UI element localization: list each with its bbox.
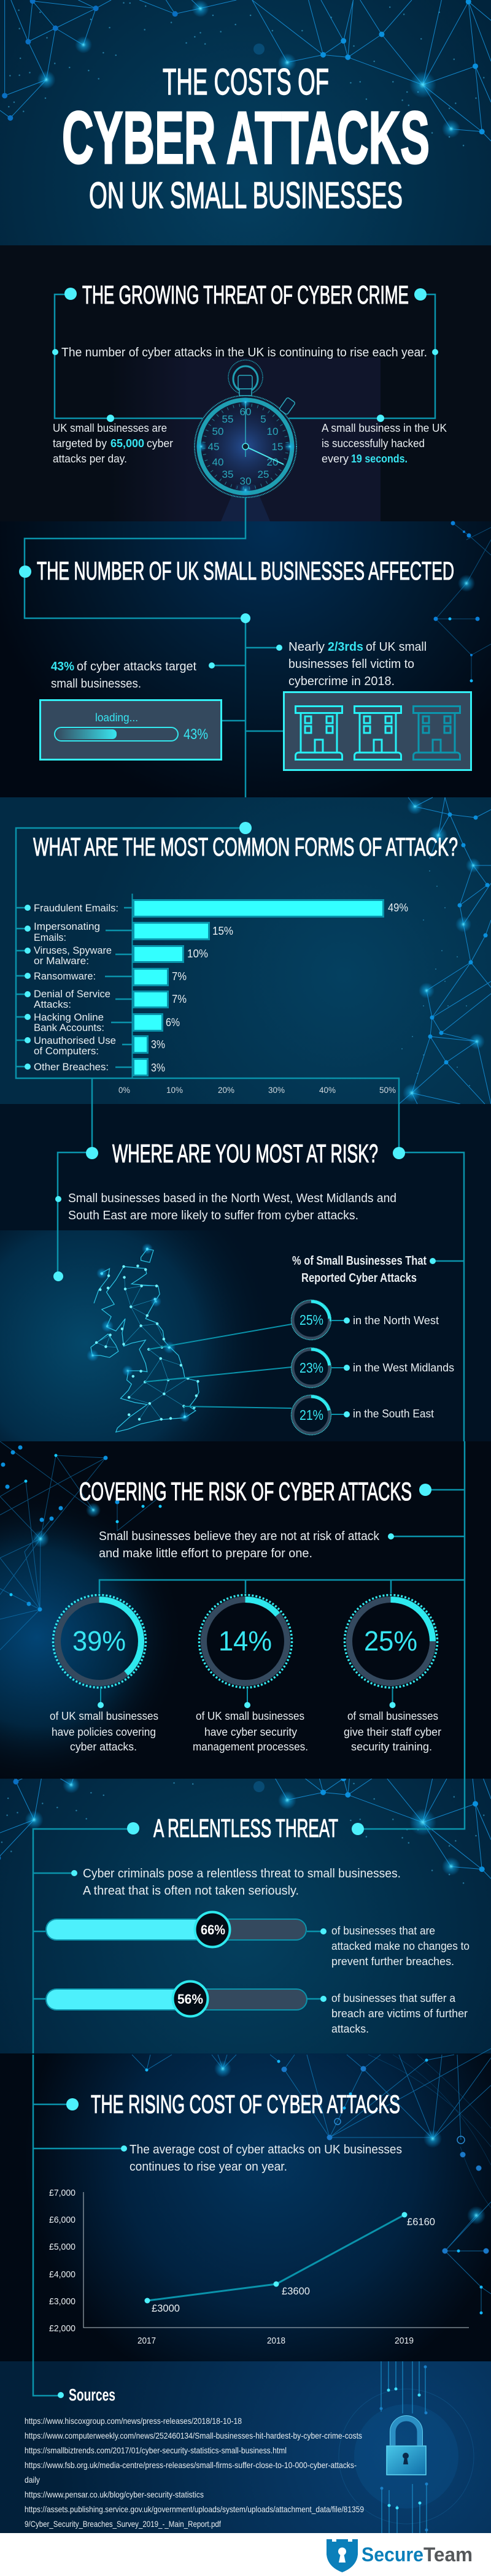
y axis labels: £3,000	[49, 2296, 75, 2307]
y axis labels: £7,000	[49, 2188, 75, 2198]
stat: 65,000 attacks per day	[53, 422, 173, 465]
intro text: Cyber criminals pose a relentless threat to small businesses.	[83, 1867, 401, 1880]
icon: building 3	[414, 707, 460, 759]
text: 43 percent: small businesses.	[51, 677, 141, 691]
line chart	[49, 2188, 469, 2346]
text: two thirds: businesses fell victim to	[288, 657, 414, 671]
intro text: The average cost of cyber attacks on UK businesses	[130, 2143, 402, 2156]
bar: fraudulent emails	[25, 900, 408, 916]
stat: hacked every 19 seconds: 19 seconds.	[351, 453, 408, 465]
bar: fraudulent emails: 49%	[388, 902, 408, 914]
right frame line	[358, 1441, 465, 1829]
gauge: South East 21%: 21%	[300, 1407, 323, 1423]
icon: stopwatch: 35	[222, 469, 233, 480]
bar: hacking online bank accounts	[25, 1011, 180, 1033]
gauge: 14 percent: have cyber security	[204, 1726, 297, 1738]
progress bar: 66 percent	[33, 1912, 470, 1968]
bar: other breaches	[25, 1059, 165, 1076]
source links: daily	[25, 2475, 40, 2485]
frame connector	[33, 1779, 465, 2055]
bar: hacking online bank accounts: Bank Accounts:	[34, 1022, 104, 1033]
x axis labels	[118, 1085, 396, 1095]
icon: stopwatch: 50	[212, 426, 223, 437]
y axis labels	[49, 2188, 75, 2334]
icon: building 1	[296, 707, 342, 759]
stat: hacked every 19 seconds: A small business in the UK	[322, 422, 447, 434]
text: two thirds: Nearly	[288, 640, 325, 654]
progress bar: 56 percent: breach are victims of further	[331, 2007, 468, 2020]
stat: 65,000 attacks per day: 65,000	[110, 437, 144, 450]
heading	[33, 2090, 400, 2118]
bar: fraudulent emails: Fraudulent Emails:	[34, 902, 118, 914]
gauge: 14 percent: management processes.	[193, 1741, 308, 1753]
icon: stopwatch: 10	[267, 426, 278, 437]
bar: viruses: or Malware:	[34, 955, 89, 967]
stat: 65,000 attacks per day: attacks per day.	[53, 453, 127, 465]
gauge: 39 percent: cyber attacks.	[70, 1741, 137, 1753]
bar: denial of service: Attacks:	[34, 999, 71, 1010]
panel: footer	[0, 2533, 491, 2576]
text: two thirds: 2/3rds	[328, 640, 363, 654]
line chart: 2019	[395, 2336, 414, 2346]
source links: https://smallbiztrends.com/2017/01/cyber-security-statistics-small-business.html	[25, 2445, 287, 2455]
stat: hacked every 19 seconds	[322, 422, 447, 465]
panel: growing threat	[0, 245, 491, 521]
gauge: 25 percent	[344, 1595, 441, 1753]
legend heading: Reported Cyber Attacks	[301, 1271, 417, 1285]
bar: unauthorised use: Unauthorised Use	[34, 1035, 116, 1046]
icon: stopwatch: 20	[267, 456, 278, 468]
bar: denial of service	[25, 988, 187, 1010]
frame connector	[52, 288, 438, 422]
line chart: £3600	[282, 2285, 310, 2297]
bar: ransomware	[25, 969, 187, 985]
icon: building 2	[355, 707, 401, 759]
source links: https://www.computerweekly.com/news/252460134/Small-businesses-hit-hardest-by-cyber-crime-costs	[25, 2431, 362, 2440]
loading bar box: loading...	[95, 711, 138, 724]
gauge: 39 percent	[50, 1595, 158, 1753]
title	[62, 61, 430, 216]
gauge: 14 percent: of UK small businesses	[196, 1710, 304, 1722]
legend heading: % of Small Businesses That	[292, 1254, 427, 1268]
frame connector	[16, 822, 399, 1153]
source links: https://assets.publishing.service.gov.uk/government/uploads/system/uploads/attachment_data/file/81359	[25, 2504, 364, 2514]
progress bar: 66 percent: prevent further breaches.	[331, 1955, 454, 1968]
progress bar: 66 percent: 66%	[201, 1922, 225, 1938]
icon: stopwatch: 15	[272, 441, 283, 453]
progress bar: 56 percent: 56%	[177, 1991, 203, 2007]
source links: https://www.pensar.co.uk/blog/cyber-security-statistics	[25, 2490, 204, 2499]
gauge: 39 percent: 39%	[72, 1625, 126, 1657]
icon: stopwatch: 55	[222, 413, 233, 425]
panel: most common forms of attack	[0, 797, 491, 1153]
stat: 65,000 attacks per day: cyber	[147, 437, 173, 450]
icon: stopwatch: 40	[212, 456, 223, 468]
legend heading	[292, 1254, 464, 1285]
text: two thirds: of UK small	[366, 640, 427, 654]
bar: other breaches: Other Breaches:	[34, 1061, 109, 1073]
icon: stopwatch: 25	[258, 469, 269, 480]
bar: hacking online bank accounts: Hacking Online	[34, 1011, 104, 1023]
gauge: 14 percent	[193, 1595, 308, 1753]
gauge: 25 percent: of small businesses	[347, 1710, 438, 1722]
panel: relentless threat	[0, 1779, 491, 2053]
x axis labels: 40%	[319, 1085, 336, 1095]
progress bar: 66 percent: of businesses that are	[331, 1925, 435, 1937]
text: 43 percent: of cyber attacks target	[77, 660, 196, 673]
bar: viruses: 10%	[187, 948, 208, 960]
frame connector	[33, 2055, 61, 2396]
text: 43 percent: 43%	[51, 660, 74, 673]
line chart: 2018	[267, 2336, 285, 2346]
gauge: North West 25%	[291, 1300, 439, 1340]
panel: sources	[0, 2361, 491, 2533]
progress bar: 56 percent: attacks.	[331, 2023, 369, 2035]
stat: 65,000 attacks per day: UK small businesses are	[53, 422, 167, 434]
progress bar: 56 percent	[33, 1981, 468, 2035]
gauge: 39 percent: have policies covering	[52, 1726, 156, 1738]
gauge: 39 percent: of UK small businesses	[50, 1710, 158, 1722]
title: THE COSTS OF	[163, 61, 329, 102]
logo: SecureTeam: Secure	[361, 2543, 423, 2566]
line chart: 2017	[137, 2336, 156, 2346]
bar: other breaches: 3%	[151, 1062, 165, 1074]
heading: A RELENTLESS THREAT	[153, 1814, 338, 1842]
gauge: West Midlands 23%: 23%	[300, 1360, 323, 1376]
y axis labels: £5,000	[49, 2242, 75, 2252]
bar chart	[16, 894, 408, 1095]
heading: sources	[58, 2385, 115, 2404]
bar: denial of service: Denial of Service	[34, 988, 110, 1000]
icon: padlock with circuits	[339, 2361, 474, 2533]
source links: 9/Cyber_Security_Breaches_Survey_2019_-_Main_Report.pdf	[25, 2519, 221, 2529]
gauge: West Midlands 23%: in the West Midlands	[353, 1362, 454, 1374]
intro text: South East are more likely to suffer from cyber attacks.	[68, 1209, 358, 1222]
bar: viruses: Viruses, Spyware	[34, 945, 112, 956]
intro text	[33, 2143, 402, 2174]
flow connector	[25, 497, 283, 828]
panel: where are you most at risk	[0, 1104, 491, 1441]
stat: hacked every 19 seconds: every	[322, 453, 349, 465]
logo: SecureTeam	[327, 2539, 473, 2572]
line chart: £6160	[407, 2216, 435, 2228]
map: United Kingdom network	[91, 1249, 199, 1432]
intro text: A threat that is often not taken seriously.	[83, 1884, 299, 1898]
gauge: West Midlands 23%	[291, 1348, 454, 1387]
logo: SecureTeam: Team	[423, 2543, 473, 2566]
intro text	[99, 1530, 465, 1560]
bar: impersonating emails: Emails:	[34, 932, 66, 943]
x axis labels: 50%	[379, 1085, 396, 1095]
panel: rising cost	[0, 2049, 491, 2396]
callout lines to map	[145, 1324, 292, 1408]
icon: stopwatch: 60	[240, 406, 251, 418]
panel: covering the risk	[0, 1441, 491, 1829]
bar: denial of service: 7%	[172, 993, 187, 1005]
y axis labels: £4,000	[49, 2269, 75, 2280]
bar: viruses	[25, 945, 208, 967]
bar: impersonating emails: 15%	[212, 925, 233, 937]
intro text: continues to rise year on year.	[130, 2160, 287, 2174]
source links	[25, 2416, 364, 2529]
x axis labels: 10%	[166, 1085, 183, 1095]
intro text	[68, 1192, 396, 1222]
panel: hero header	[0, 0, 491, 245]
buildings box	[284, 692, 471, 770]
bar: ransomware: Ransomware:	[34, 970, 96, 982]
loading bar box: 43%	[184, 726, 208, 743]
loading bar box	[41, 700, 221, 759]
y axis labels: £2,000	[49, 2323, 75, 2334]
bar: unauthorised use	[25, 1035, 165, 1057]
bar: unauthorised use: 3%	[151, 1038, 165, 1051]
gauge: South East 21%: in the South East	[353, 1408, 434, 1420]
gauge: 25 percent: security training.	[351, 1741, 432, 1753]
text: two thirds	[288, 640, 427, 688]
intro text: The number of cyber attacks in the UK is continuing to rise each year.	[61, 346, 427, 359]
gauge: North West 25%: in the North West	[353, 1314, 439, 1327]
intro text: and make little effort to prepare for one.	[99, 1547, 312, 1560]
progress bar: 66 percent: attacked make no changes to	[331, 1940, 470, 1952]
intro text	[33, 1867, 401, 1898]
source links: https://www.fsb.org.uk/media-centre/press-releases/small-firms-suffer-close-to-10-000-cyber-attacks-	[25, 2460, 357, 2470]
bar: impersonating emails	[25, 921, 233, 943]
bar: impersonating emails: Impersonating	[34, 921, 100, 932]
text: two thirds: cybercrime in 2018.	[288, 675, 395, 688]
icon: stopwatch: 5	[260, 413, 266, 425]
x axis labels: 30%	[268, 1085, 285, 1095]
heading: sources: Sources	[69, 2385, 115, 2404]
icon: stopwatch	[195, 360, 296, 521]
bar: unauthorised use: of Computers:	[34, 1045, 99, 1057]
intro text: Small businesses based in the North West, West Midlands and	[68, 1192, 396, 1205]
text: 43 percent	[51, 660, 196, 691]
icon: stopwatch: 30	[240, 475, 251, 487]
x axis labels: 0%	[118, 1085, 130, 1095]
gauge: 14 percent: 14%	[218, 1625, 272, 1657]
line chart: £3000	[152, 2302, 180, 2314]
connector to gauges	[99, 1580, 465, 1593]
gauge: South East 21%	[291, 1395, 434, 1435]
bar: hacking online bank accounts: 6%	[166, 1016, 180, 1029]
x axis labels: 20%	[218, 1085, 234, 1095]
progress bar: 56 percent: of businesses that suffer a	[331, 1992, 456, 2004]
source links: https://www.hiscoxgroup.com/news/press-releases/2018/18-10-18	[25, 2416, 242, 2426]
gauge: 25 percent: give their staff cyber	[344, 1726, 441, 1738]
frame connector	[53, 1104, 464, 1441]
intro text: Small businesses believe they are not at risk of attack	[99, 1530, 380, 1543]
y axis labels: £6,000	[49, 2215, 75, 2225]
bar: ransomware: 7%	[172, 970, 187, 983]
stat: 65,000 attacks per day: targeted by	[53, 437, 107, 450]
stat: hacked every 19 seconds: is successfully hacked	[322, 437, 425, 450]
panel: small businesses affected	[0, 497, 491, 828]
gauge: 25 percent: 25%	[364, 1625, 417, 1657]
icon: stopwatch: 45	[208, 441, 219, 453]
gauge: North West 25%: 25%	[300, 1312, 323, 1328]
